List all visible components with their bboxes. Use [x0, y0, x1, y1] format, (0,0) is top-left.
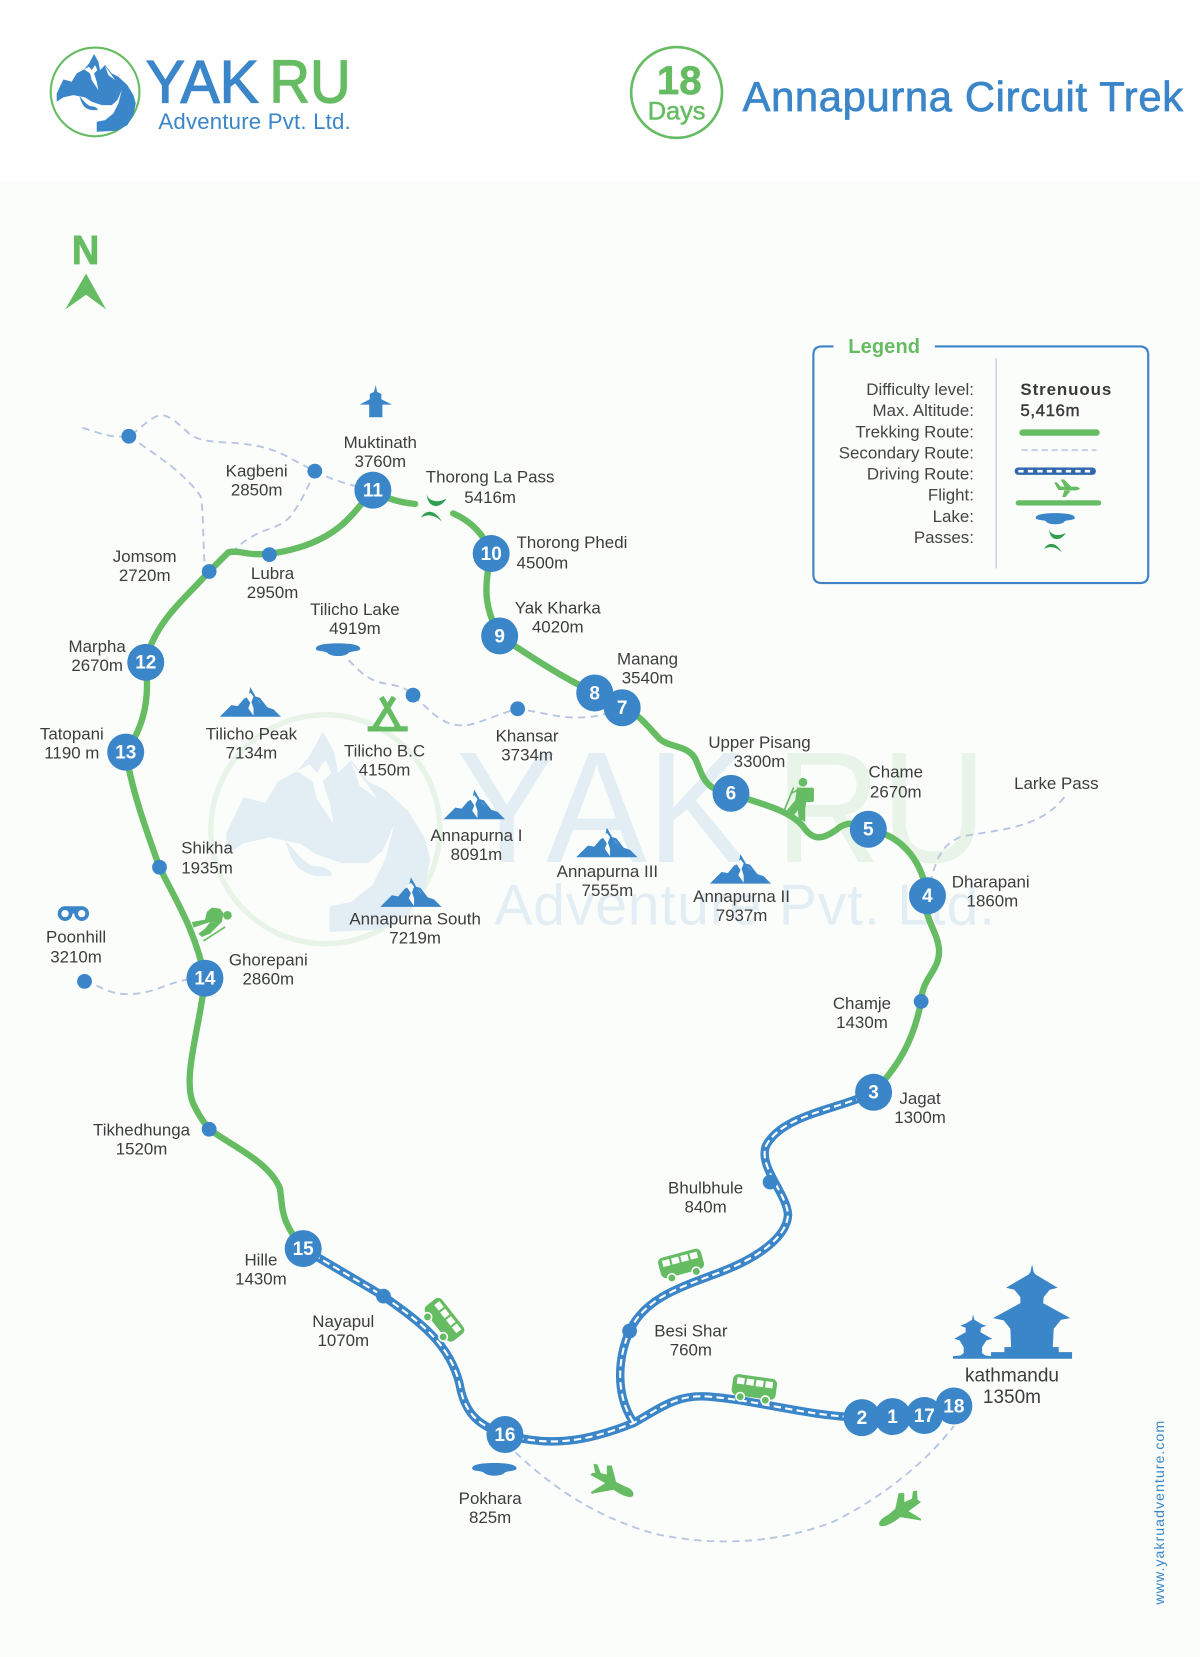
- stop numbers: 8: [589, 683, 600, 704]
- label: Tilicho Lake: 4919m: [329, 619, 381, 638]
- trekking route swatch: [1023, 430, 1096, 436]
- label: Yak Kharka: Yak Kharka: [515, 599, 601, 618]
- label: Lubra: 2950m: [247, 583, 298, 602]
- legend labels: Passes:: [914, 528, 974, 547]
- lake swatch: [1036, 513, 1075, 524]
- stop numbers: 4: [922, 886, 933, 907]
- label: Dharapani: Dharapani: [952, 872, 1030, 891]
- label: Tilicho Lake: Tilicho Lake: [310, 600, 400, 619]
- icon: descending hiker: [192, 908, 232, 941]
- stop numbers: [107, 472, 972, 1453]
- label: Tatopani: Tatopani: [40, 724, 104, 743]
- icon: peak Annapurna III: [576, 828, 638, 857]
- label: Thorong La Pass: Thorong La Pass: [426, 468, 554, 487]
- legend: [813, 336, 1148, 583]
- label: Marpha: Marpha: [69, 637, 126, 656]
- logo mountain and yak emblem: [57, 54, 136, 132]
- stop numbers: 15: [293, 1239, 314, 1260]
- icon: peak Annapurna I: [444, 790, 505, 819]
- label: Upper Pisang: Upper Pisang: [708, 733, 811, 752]
- label: Nayapul: Nayapul: [312, 1312, 374, 1331]
- legend labels: Difficulty level:: [866, 380, 974, 399]
- altitude value: 5,416m: [1020, 401, 1080, 420]
- label: Khansar: Khansar: [496, 727, 559, 746]
- label: Annapurna II: Annapurna II: [693, 887, 790, 906]
- label: Besi Shar: Besi Shar: [654, 1321, 728, 1340]
- trekking route: [126, 490, 939, 1249]
- label: Annapurna I: 8091m: [451, 845, 502, 864]
- label: Pokhara: Pokhara: [459, 1489, 522, 1508]
- label: Thorong Phedi: Thorong Phedi: [517, 533, 627, 552]
- label: Muktinath: Muktinath: [344, 433, 417, 452]
- label: Chamje: 1430m: [836, 1013, 888, 1032]
- stop numbers: 7: [617, 698, 627, 719]
- days badge: [631, 47, 722, 138]
- label: Bhulbhule: Bhulbhule: [668, 1179, 743, 1198]
- stop numbers: 18: [943, 1396, 964, 1417]
- icon: Kathmandu temples: [953, 1264, 1072, 1359]
- legend labels: Secondary Route:: [839, 443, 974, 462]
- stop numbers: 6: [726, 784, 736, 805]
- label: Annapurna III: Annapurna III: [557, 862, 658, 881]
- days badge: Days: [648, 97, 705, 125]
- icon: plane inbound: [879, 1490, 921, 1526]
- stop numbers: 3: [868, 1083, 879, 1104]
- title: Annapurna Circuit Trek: [743, 73, 1183, 120]
- watermark logo: YAK: [456, 719, 748, 896]
- label: Manang: Manang: [617, 649, 678, 668]
- icon: Thorong La pass: [421, 494, 447, 522]
- label: Manang: 3540m: [622, 668, 673, 687]
- waypoint dots: [77, 429, 929, 1338]
- label: Thorong La Pass: 5416m: [464, 488, 516, 507]
- stop numbers: 9: [494, 626, 505, 647]
- watermark logo: RU: [775, 719, 987, 896]
- label: Larke Pass: Larke Pass: [1014, 774, 1099, 793]
- label: Poonhill: 3210m: [50, 947, 102, 966]
- label: Jagat: Jagat: [899, 1089, 941, 1108]
- label: Thorong Phedi: 4500m: [517, 553, 568, 572]
- label: Pokhara: 825m: [469, 1508, 511, 1527]
- label: Tilicho B.C: Tilicho B.C: [344, 741, 425, 760]
- label: Ghorepani: Ghorepani: [229, 951, 308, 970]
- icon: Tilicho base camp tent: [368, 697, 408, 729]
- icon: bus right: [730, 1373, 778, 1406]
- label: Chamje: Chamje: [833, 994, 891, 1013]
- legend labels: Max. Altitude:: [873, 401, 974, 420]
- icon: peak Tilicho: [220, 687, 281, 717]
- label: Chame: Chame: [869, 762, 923, 781]
- route labels: [40, 433, 1099, 1527]
- label: Tatopani: 1190 m: [44, 743, 99, 762]
- label: Annapurna South: Annapurna South: [349, 909, 481, 928]
- label: Dharapani: 1860m: [967, 891, 1018, 910]
- label: Marpha: 2670m: [71, 656, 123, 675]
- label: Muktinath: 3760m: [354, 452, 406, 471]
- stop numbers: 12: [135, 653, 156, 674]
- north arrow: N: [72, 227, 99, 273]
- legend labels: Lake:: [933, 507, 974, 526]
- stop numbers: 16: [494, 1425, 515, 1446]
- icon: peak Annapurna II: [710, 854, 771, 884]
- icon: trekker: [784, 778, 814, 822]
- label: Tikhedhunga: 1520m: [116, 1140, 167, 1159]
- label: Annapurna II: 7937m: [716, 906, 767, 925]
- secondary routes: [82, 415, 1065, 1541]
- label: Chame: 2670m: [870, 783, 922, 802]
- logo tagline: Adventure Pvt. Ltd.: [158, 109, 351, 134]
- label: Jomsom: Jomsom: [113, 547, 177, 566]
- label: kathmandu: 1350m: [983, 1387, 1041, 1408]
- icon: binoculars: [58, 906, 89, 921]
- label: Hille: 1430m: [235, 1270, 287, 1289]
- icon: Tilicho lake: [316, 643, 360, 656]
- label: Besi Shar: 760m: [670, 1340, 712, 1359]
- label: Yak Kharka: 4020m: [532, 618, 584, 637]
- label: Upper Pisang: 3300m: [734, 752, 785, 771]
- label: Khansar: 3734m: [501, 746, 553, 765]
- label: kathmandu: kathmandu: [965, 1366, 1059, 1387]
- icon: bus upper: [657, 1247, 707, 1284]
- label: Hille: Hille: [244, 1251, 277, 1270]
- driving route swatch: [1018, 468, 1092, 475]
- label: Jomsom: 2720m: [119, 566, 171, 585]
- legend labels: Trekking Route:: [855, 422, 974, 441]
- website: www.yakruadventure.com: [1152, 1421, 1168, 1606]
- secondary route swatch: [1021, 449, 1096, 451]
- label: Annapurna South: 7219m: [389, 928, 441, 947]
- label: Shikha: Shikha: [181, 839, 233, 858]
- legend heading: Legend: [848, 336, 920, 358]
- label: Tilicho Peak: Tilicho Peak: [206, 724, 298, 743]
- logo wordmark green: RU: [269, 47, 351, 115]
- logo: [51, 47, 351, 136]
- label: Nayapul: 1070m: [317, 1331, 369, 1350]
- label: Jagat: 1300m: [894, 1108, 946, 1127]
- label: Ghorepani: 2860m: [242, 970, 294, 989]
- watermark logo: [211, 715, 995, 944]
- label: Annapurna III: 7555m: [582, 881, 633, 900]
- icon: Muktinath temple: [360, 385, 392, 417]
- label: Lubra: Lubra: [251, 564, 295, 583]
- label: Kagbeni: Kagbeni: [226, 461, 288, 480]
- stop numbers: 5: [863, 820, 874, 841]
- label: Poonhill: Poonhill: [46, 927, 106, 946]
- label: Tikhedhunga: Tikhedhunga: [93, 1121, 191, 1140]
- stop numbers: 13: [115, 742, 136, 763]
- logo wordmark: YAK: [146, 47, 259, 115]
- stop numbers: 10: [481, 544, 502, 565]
- icon: bus left: [418, 1296, 466, 1347]
- flight swatch: [1018, 479, 1099, 503]
- legend labels: Flight:: [928, 486, 974, 505]
- watermark logo: Adventure Pvt. Ltd.: [494, 873, 995, 937]
- icon: Pokhara lake: [472, 1463, 517, 1476]
- stop numbers: 2: [857, 1408, 867, 1429]
- stop numbers: 1: [887, 1407, 898, 1428]
- label: Bhulbhule: 840m: [685, 1198, 727, 1217]
- legend labels: Driving Route:: [867, 465, 974, 484]
- label: Annapurna I: Annapurna I: [430, 826, 522, 845]
- label: Tilicho Peak: 7134m: [226, 743, 277, 762]
- stop numbers: 14: [194, 969, 216, 990]
- label: Tilicho B.C: 4150m: [359, 760, 410, 779]
- icon: peak Annapurna South: [380, 877, 442, 907]
- stop numbers: 17: [914, 1406, 935, 1427]
- driving route: [303, 1092, 874, 1441]
- icon: plane outbound: [590, 1464, 634, 1497]
- days badge: 18: [657, 58, 702, 103]
- north arrow: [65, 227, 106, 310]
- label: Shikha: 1935m: [181, 859, 233, 878]
- stop numbers: 11: [363, 480, 383, 501]
- label: Kagbeni: 2850m: [231, 480, 283, 499]
- difficulty value: Strenuous: [1020, 380, 1111, 399]
- pass swatch: [1044, 529, 1066, 553]
